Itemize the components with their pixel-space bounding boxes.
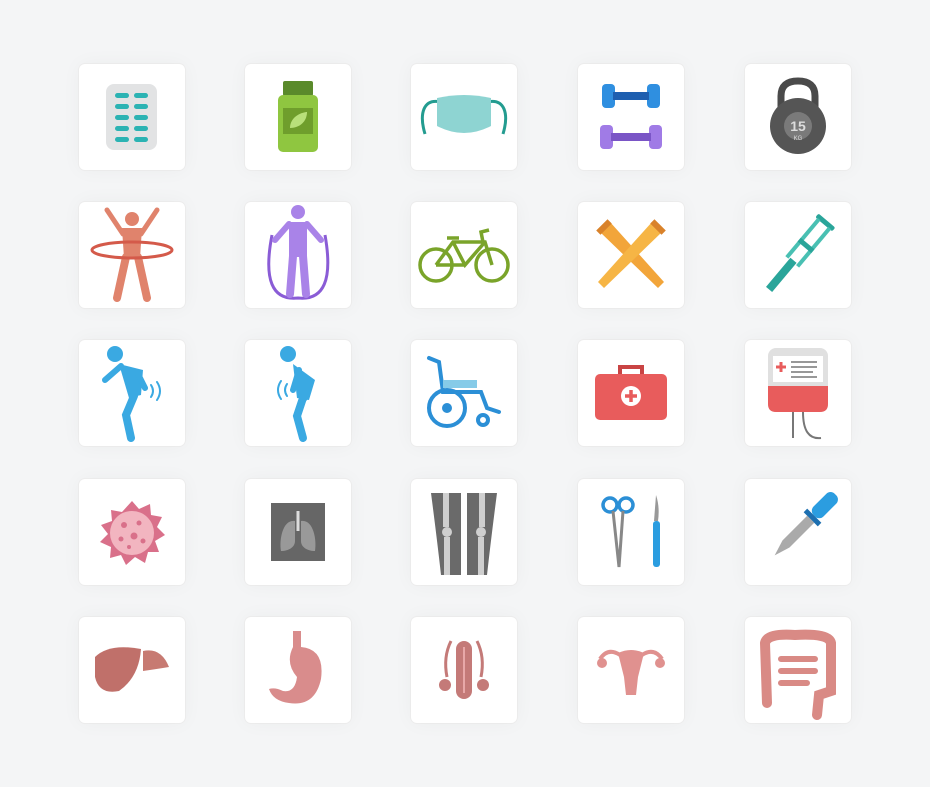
card: dumbbells [578,64,684,170]
card: stomach [245,617,351,723]
card: back pain 1 [79,340,185,446]
card: crossed bats [578,202,684,308]
card: crutch [745,202,851,308]
card: face mask [411,64,517,170]
card: wheelchair [411,340,517,446]
card: blood bag [745,340,851,446]
card: first aid kit [578,340,684,446]
card: kettlebell [745,64,851,170]
card: scissors and scalpel [578,479,684,585]
card: liver [79,617,185,723]
card: virus cell [79,479,185,585]
card: back pain 2 [245,340,351,446]
card: dropper [745,479,851,585]
card: jump rope [245,202,351,308]
card: uterus [578,617,684,723]
card: kettlebell: KG [794,136,803,142]
card: lung x-ray [245,479,351,585]
card: pill blister [79,64,185,170]
card: supplement jar [245,64,351,170]
card: hula hoop [79,202,185,308]
card: knee x-ray [411,479,517,585]
card: kettlebell: 15 [790,118,806,134]
card: intestine [745,617,851,723]
card: male reproductive [411,617,517,723]
card: bicycle [411,202,517,308]
